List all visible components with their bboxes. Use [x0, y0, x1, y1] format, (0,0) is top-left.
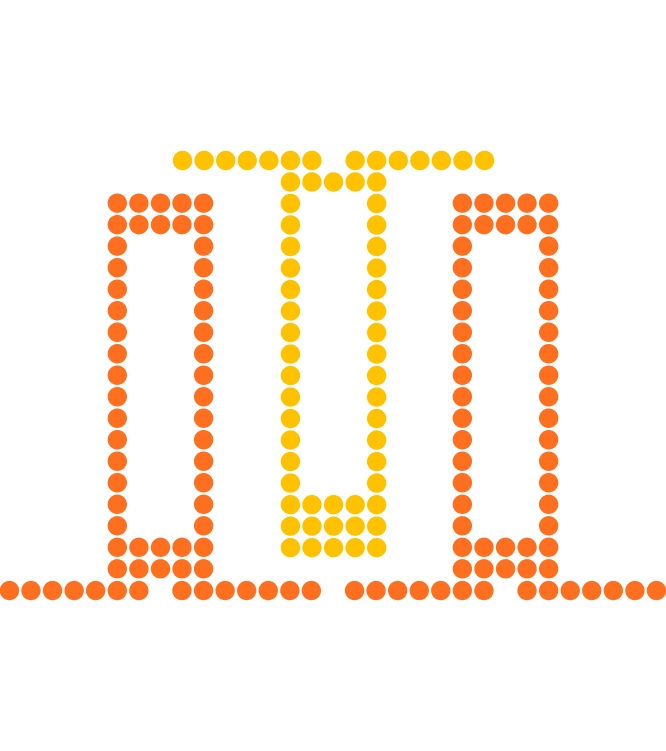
yellow centre structure [173, 151, 494, 557]
orange left structure [108, 193, 213, 579]
orange right structure [453, 193, 558, 579]
orange bottom row [0, 581, 666, 600]
